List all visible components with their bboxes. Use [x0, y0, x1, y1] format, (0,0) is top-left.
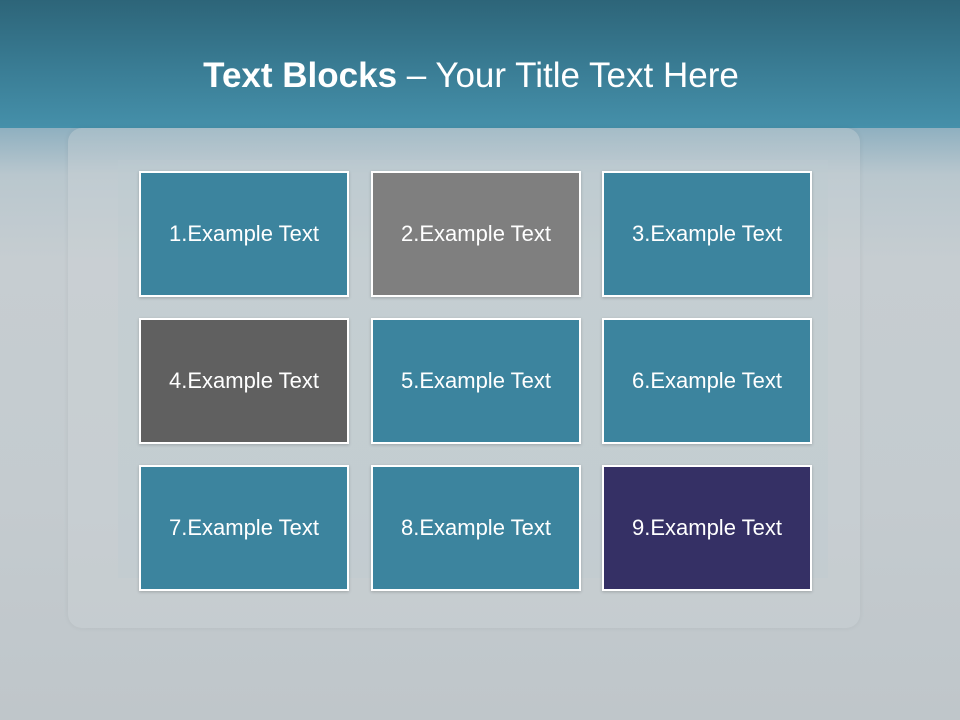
block 7 — [139, 465, 349, 591]
block 9 — [602, 465, 812, 591]
block 4: 4.Example Text — [169, 368, 319, 393]
block 1 — [139, 171, 349, 297]
block 4 — [139, 318, 349, 444]
block 8: 8.Example Text — [401, 515, 551, 540]
title: Text Blocks – Your Title Text Here — [203, 56, 739, 95]
header band — [0, 0, 960, 128]
tablet screen — [118, 160, 828, 578]
block 3: 3.Example Text — [632, 221, 782, 246]
block 6 — [602, 318, 812, 444]
block 6: 6.Example Text — [632, 368, 782, 393]
block 5: 5.Example Text — [401, 368, 551, 393]
block 5 — [371, 318, 581, 444]
tablet background — [68, 128, 860, 628]
block 3 — [602, 171, 812, 297]
block 2: 2.Example Text — [401, 221, 551, 246]
block 9: 9.Example Text — [632, 515, 782, 540]
block 7: 7.Example Text — [169, 515, 319, 540]
block 8 — [371, 465, 581, 591]
block 1: 1.Example Text — [169, 221, 319, 246]
block 2 — [371, 171, 581, 297]
